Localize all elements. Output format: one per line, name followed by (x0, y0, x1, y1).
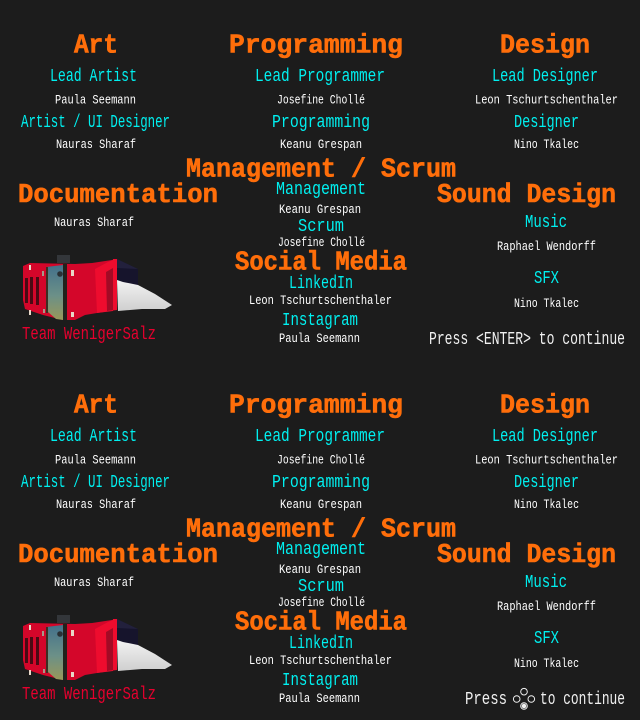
icon: overturned red truck spilling salt (23, 615, 172, 680)
credits screen: gamepad variant (18, 392, 625, 710)
section: Documentation: Nauras Sharaf (54, 215, 134, 230)
section: Social Media: Paula Seemann (279, 691, 360, 706)
section: Social Media (235, 248, 407, 346)
section: Design (475, 32, 618, 152)
team name: Team WenigerSalz (22, 325, 156, 345)
section: Management / Scrum (186, 156, 456, 250)
section: Management / Scrum: Scrum (298, 217, 344, 237)
section: Design: Design (500, 32, 590, 62)
section: Programming (229, 32, 403, 152)
section: Social Media: Paula Seemann (279, 331, 360, 346)
section: Art: Nauras Sharaf (56, 137, 136, 152)
section: Programming: Keanu Grespan (280, 137, 362, 152)
section: Social Media: Instagram (282, 671, 358, 691)
section: Management / Scrum: Keanu Grespan (279, 562, 361, 577)
section: Social Media: Social Media (235, 608, 407, 638)
section: Management / Scrum: Josefine Chollé (278, 235, 365, 250)
section: Art: Art (74, 32, 118, 62)
section: Sound Design (437, 541, 616, 671)
section: Design: Designer (514, 473, 579, 493)
section: Art: Artist / UI Designer (21, 473, 170, 493)
section: Art (21, 392, 170, 512)
section: Programming (229, 392, 403, 512)
section: Programming: Programming (229, 392, 403, 422)
section: Management / Scrum: Scrum (298, 577, 344, 597)
section: Social Media: Leon Tschurtschenthaler (249, 653, 392, 668)
team name: Team WenigerSalz (22, 685, 156, 705)
section: Sound Design: Music (525, 213, 567, 233)
section: Management / Scrum: Management (276, 540, 366, 560)
section: Sound Design: Raphael Wendorff (497, 239, 596, 254)
section: Sound Design: SFX (534, 269, 559, 289)
section: Social Media: LinkedIn (289, 634, 353, 654)
section: Art (21, 32, 170, 152)
section: Sound Design: SFX (534, 629, 559, 649)
section: Design: Lead Designer (492, 427, 598, 447)
section: Social Media (235, 608, 407, 706)
section: Art: Nauras Sharaf (56, 497, 136, 512)
section: Documentation: Nauras Sharaf (54, 575, 134, 590)
section: Social Media: Social Media (235, 248, 407, 278)
continue prompt with gamepad buttons: Press (465, 690, 507, 710)
section: Art: Artist / UI Designer (21, 113, 170, 133)
credits screen: keyboard variant (18, 32, 625, 350)
section: Programming: Lead Programmer (255, 67, 385, 87)
section: Documentation (18, 541, 218, 590)
section: Design: Lead Designer (492, 67, 598, 87)
continue prompt with gamepad buttons (465, 688, 625, 710)
section: Design: Nino Tkalec (514, 137, 579, 152)
section: Art: Art (74, 392, 118, 422)
section: Documentation (18, 181, 218, 230)
section: Design: Design (500, 392, 590, 422)
section: Documentation: Documentation (18, 181, 218, 211)
section: Social Media: Leon Tschurtschenthaler (249, 293, 392, 308)
section: Management / Scrum: Keanu Grespan (279, 202, 361, 217)
section: Design: Designer (514, 113, 579, 133)
section: Programming: Programming (272, 113, 370, 133)
section: Management / Scrum: Management / Scrum (186, 516, 456, 546)
section: Design: Nino Tkalec (514, 497, 579, 512)
section: Art: Lead Artist (50, 67, 137, 87)
section: Sound Design: Sound Design (437, 181, 616, 211)
icon: gamepad face buttons (513, 688, 535, 709)
section: Sound Design: Nino Tkalec (514, 656, 579, 671)
section: Design (475, 392, 618, 512)
section: Programming: Josefine Chollé (277, 452, 365, 468)
section: Social Media: LinkedIn (289, 274, 353, 294)
section: Sound Design (437, 181, 616, 311)
section: Art: Paula Seemann (55, 92, 136, 108)
section: Programming: Keanu Grespan (280, 497, 362, 512)
section: Management / Scrum: Josefine Chollé (278, 595, 365, 610)
section: Programming: Programming (272, 473, 370, 493)
section: Programming: Josefine Chollé (277, 92, 365, 108)
section: Sound Design: Sound Design (437, 541, 616, 571)
section: Documentation: Documentation (18, 541, 218, 571)
section: Sound Design: Raphael Wendorff (497, 599, 596, 614)
section: Social Media: Instagram (282, 311, 358, 331)
section: Art: Paula Seemann (55, 452, 136, 468)
icon: overturned red truck spilling salt (23, 255, 172, 320)
section: Programming: Programming (229, 32, 403, 62)
section: Art: Lead Artist (50, 427, 137, 447)
section: Management / Scrum: Management (276, 180, 366, 200)
section: Management / Scrum: Management / Scrum (186, 156, 456, 186)
section: Sound Design: Nino Tkalec (514, 296, 579, 311)
section: Management / Scrum (186, 516, 456, 610)
section: Programming: Lead Programmer (255, 427, 385, 447)
section: Sound Design: Music (525, 573, 567, 593)
